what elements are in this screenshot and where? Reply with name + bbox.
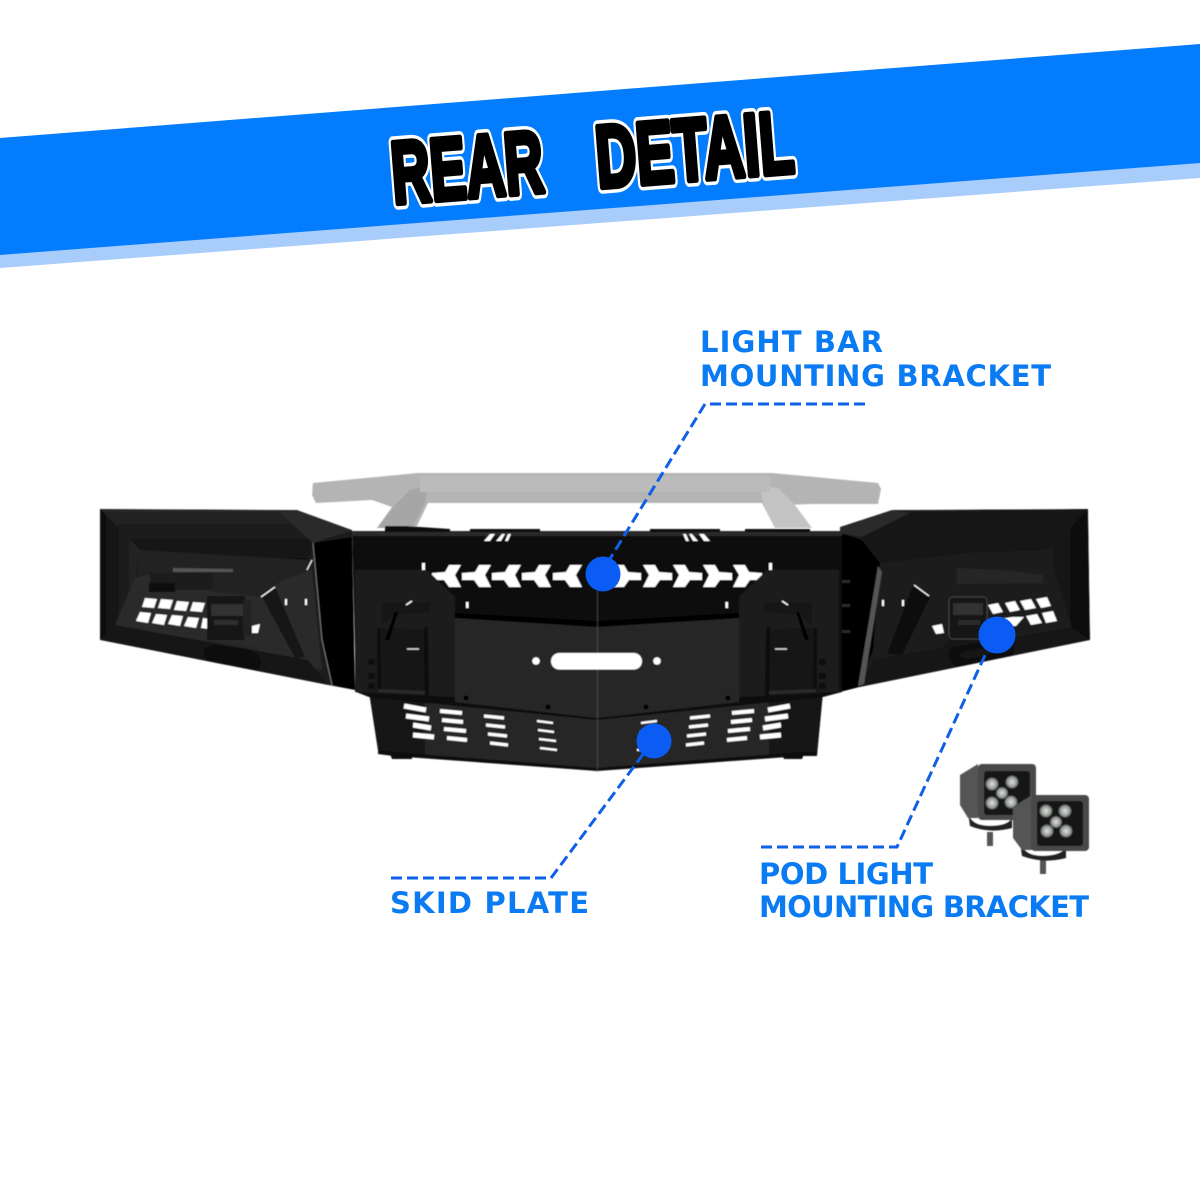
diagonal band: [262, 587, 305, 658]
winch slot: [532, 653, 661, 670]
back panel: [189, 558, 305, 568]
side facet: [100, 509, 140, 640]
bracket shelf: [150, 573, 213, 590]
icon: pod lights: [960, 764, 1089, 874]
leader line: light bar: [608, 404, 865, 562]
centre winch plate: [455, 618, 739, 718]
label: light bar mounting bracket: [700, 325, 1051, 393]
label: skid plate: SKID PLATE: [390, 886, 589, 920]
marker: skid plate: [636, 724, 672, 758]
bumper: [100, 473, 1090, 772]
top facet: [100, 509, 313, 560]
bottom strip: [100, 625, 328, 685]
label: pod light mounting bracket: MOUNTING BRACKET: [759, 890, 1089, 924]
marker: pod light: [978, 616, 1016, 654]
title: [388, 92, 797, 222]
mount plate: [906, 584, 1072, 647]
bottom strip: [860, 628, 1090, 687]
right wing: [840, 509, 1090, 692]
black corner section: [313, 537, 355, 690]
corner facet: [840, 510, 910, 537]
pod light module right: [949, 597, 987, 639]
mount plate: [115, 570, 322, 670]
banner shadow strip: [0, 160, 1200, 268]
title: DETAIL: [592, 92, 797, 206]
label: pod light mounting bracket: [759, 857, 1089, 924]
title: REAR: [388, 112, 547, 222]
leader line: skid plate: [391, 745, 650, 878]
light bar: [312, 473, 881, 528]
side facet: [1070, 510, 1090, 640]
pod light back: [960, 764, 1036, 846]
pod light front: [1013, 795, 1089, 874]
corner facet: [292, 511, 350, 544]
banner: [0, 44, 1200, 268]
title: REAR: [388, 112, 547, 222]
centre box: [352, 532, 842, 720]
label: pod light mounting bracket: POD LIGHT: [759, 857, 933, 891]
label: light bar mounting bracket: LIGHT BAR: [700, 325, 883, 359]
pod light module left: [206, 596, 245, 640]
skid plate: [369, 692, 823, 770]
black corner section: [840, 533, 880, 692]
top facet: [862, 509, 1088, 563]
marker: light bar: [586, 556, 620, 592]
title: DETAIL: [592, 92, 797, 206]
leader line: pod light: [761, 640, 992, 847]
left wing: [100, 509, 355, 690]
diagonal band: [887, 585, 930, 655]
banner band: [0, 44, 1200, 255]
back panel: [957, 550, 1053, 585]
label: light bar mounting bracket: MOUNTING BRACKET: [700, 359, 1051, 393]
